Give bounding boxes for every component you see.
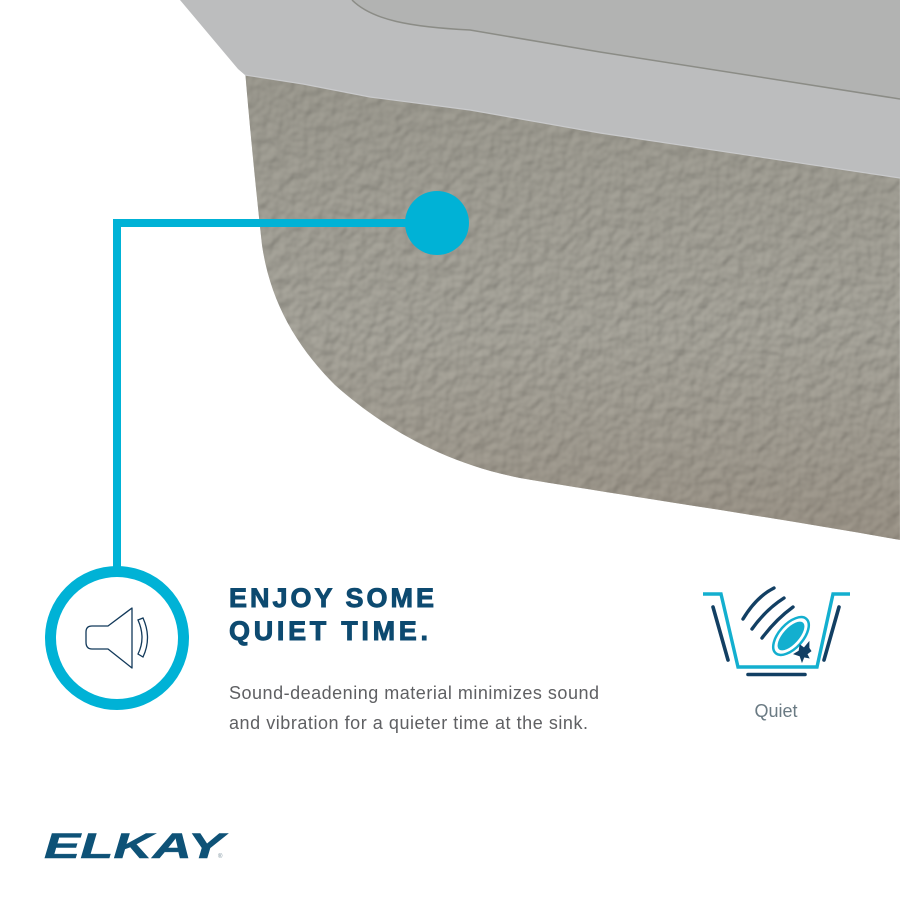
body text: and vibration for a quieter time at the sink. [229,713,588,733]
photo: sink underside with sound-deadening coating [180,0,900,540]
icon: speaker in circle [50,572,184,704]
icon: quiet sink [703,588,850,674]
logo: Elkay: ELKAY [44,827,228,866]
body text [229,683,599,733]
heading: ENJOY SOME [229,583,434,613]
logo: Elkay: ® [218,853,223,860]
logo: Elkay [44,827,228,866]
callout connector line and dot [117,191,469,570]
body text: Sound-deadening material minimizes sound [229,683,599,703]
heading line 2: QUIET TIME. [229,616,428,646]
icon label: Quiet [754,701,798,721]
